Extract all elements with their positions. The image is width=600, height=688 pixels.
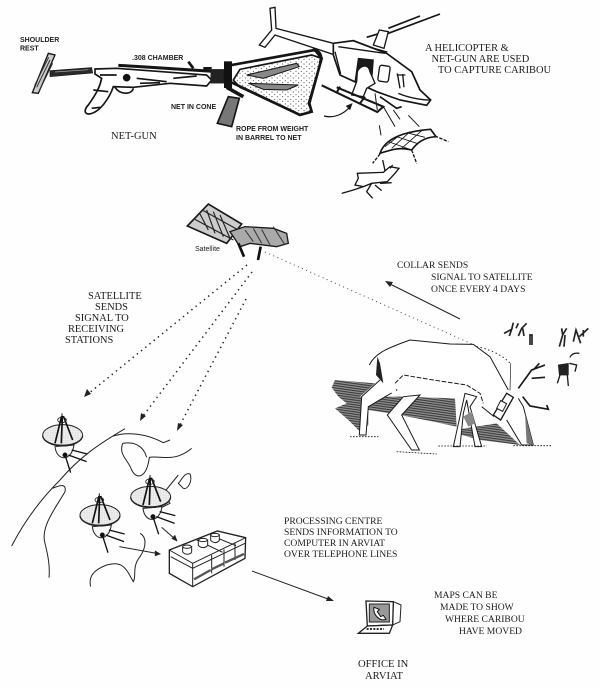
label: shoulder rest: REST [20, 46, 39, 52]
collar antenna [509, 363, 512, 391]
text: satellite caption: SATELLITE [88, 291, 142, 302]
text: maps caption: WHERE CARIBOU [445, 614, 525, 625]
signal path: collar to satellite [265, 252, 472, 344]
distant caribou [504, 323, 532, 345]
stock rod [50, 68, 93, 77]
shoulder rest [32, 53, 55, 93]
window [378, 65, 390, 82]
signal path: satellite to station three [177, 299, 246, 431]
text: processing centre caption: COMPUTER IN ARVIAT [284, 538, 385, 549]
signal path: satellite to station two [140, 272, 252, 421]
head [483, 390, 533, 445]
illustration: net-gun [32, 53, 243, 127]
firing lines [375, 93, 419, 135]
net [380, 129, 436, 153]
body [370, 340, 508, 407]
running caribou [355, 167, 399, 187]
processing centre [169, 531, 246, 587]
label: shoulder rest: SHOULDER [20, 37, 59, 44]
label: net in cone: NET IN CONE [171, 104, 216, 111]
station one [43, 413, 87, 473]
ground lines [350, 437, 552, 454]
station two [80, 493, 125, 553]
gun body and grip [85, 68, 212, 114]
illustration: collared caribou [332, 323, 588, 454]
arrows to processing centre [119, 527, 175, 553]
text: maps caption: MAPS CAN BE [434, 590, 498, 601]
label: net-gun: NET-GUN [111, 131, 157, 142]
fuselage [333, 41, 431, 105]
label: chamber: .308 CHAMBER [132, 55, 183, 62]
text: maps caption: HAVE MOVED [459, 626, 522, 637]
text: satellite caption: RECEIVING [68, 324, 124, 335]
text: collar caption: ONCE EVERY 4 DAYS [431, 284, 525, 295]
ground shadows [332, 380, 457, 432]
collar [493, 393, 513, 420]
illustration: helicopter and net cone [230, 7, 448, 198]
label: satellite: Satellite [195, 246, 220, 253]
text: collar caption: COLLAR SENDS [397, 260, 468, 271]
text: collar caption: SIGNAL TO SATELLITE [431, 272, 533, 283]
text: processing centre caption: SENDS INFORMATION TO [284, 527, 398, 538]
arrow: processing centre to office [252, 571, 334, 601]
text: satellite caption: SIGNAL TO [75, 313, 129, 324]
skids [322, 85, 383, 112]
station three [131, 475, 175, 534]
arrow: collar signal direction [385, 281, 460, 319]
label: office: OFFICE IN [358, 659, 409, 670]
illustration: satellite [187, 204, 288, 260]
text: satellite caption: SENDS [95, 302, 128, 313]
tail rotor and boom [259, 7, 335, 55]
door and crew [355, 58, 373, 82]
rotor [367, 14, 440, 37]
illustration: receiving stations and coastline [12, 413, 246, 587]
signal path: satellite to station one [84, 265, 247, 397]
pilot [397, 73, 405, 88]
curved arrow [324, 106, 351, 117]
antlers [518, 363, 548, 409]
text: maps caption: MADE TO SHOW [440, 602, 515, 613]
label: rope: IN BARREL TO NET [236, 135, 302, 142]
label: office: ARVIAT [365, 671, 404, 682]
text: helicopter caption: A HELICOPTER & [425, 43, 509, 54]
text: processing centre caption: PROCESSING CENTRE [284, 516, 382, 527]
text: helicopter caption: TO CAPTURE CARIBOU [438, 65, 551, 76]
front handle [217, 97, 239, 127]
legs [359, 380, 397, 435]
coastline [12, 429, 125, 546]
label: rope: ROPE FROM WEIGHT [236, 126, 309, 133]
chamber rail [118, 65, 213, 71]
net cone [233, 55, 322, 115]
icon: office computer with telephone [358, 601, 401, 633]
text: satellite caption: STATIONS [65, 335, 113, 346]
text: processing centre caption: OVER TELEPHONE LINES [284, 549, 397, 560]
text: helicopter caption: NET-GUN ARE USED [432, 54, 530, 65]
